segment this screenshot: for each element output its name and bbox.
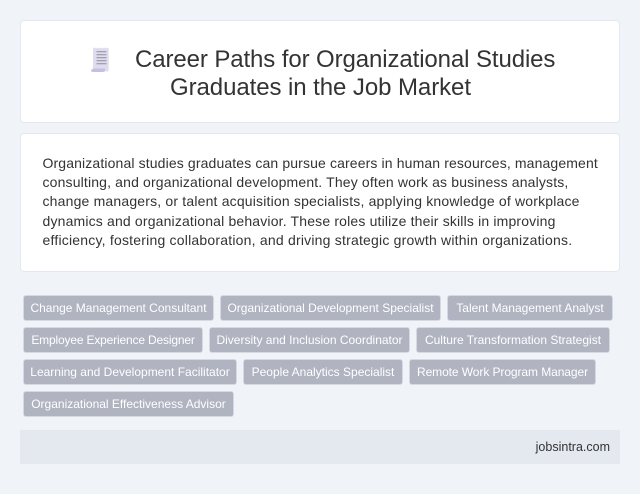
tag (243, 359, 403, 385)
tag (23, 391, 234, 417)
tag: Organizational Effectiveness Advisor (31, 397, 226, 411)
description text: consulting, and organizational development. They often work as business analysts, (42, 174, 568, 190)
tag list (23, 295, 613, 417)
heading line 1: Career Paths for Organizational Studies (135, 46, 555, 73)
panel: description (20, 133, 620, 272)
footer source text: jobsintra.com (536, 440, 610, 454)
tag: Culture Transformation Strategist (425, 333, 601, 347)
heading line 2: Graduates in the Job Market (170, 74, 471, 101)
tag (447, 295, 613, 321)
tag (209, 327, 410, 353)
footer bar (20, 430, 620, 464)
tag (409, 359, 596, 385)
tag (220, 295, 441, 321)
tag: Remote Work Program Manager (417, 365, 588, 379)
tag: Diversity and Inclusion Coordinator (216, 333, 403, 347)
tag: Organizational Development Specialist (227, 301, 434, 315)
tag (416, 327, 610, 353)
tag: Change Management Consultant (30, 301, 207, 315)
description text: Organizational studies graduates can pursue careers in human resources, management (42, 155, 598, 171)
tag: Talent Management Analyst (456, 301, 604, 315)
description text (42, 155, 598, 248)
tag (23, 295, 214, 321)
tag: Employee Experience Designer (31, 333, 195, 347)
description text: efficiency, fostering collaboration, and driving strategic growth within organizations. (42, 232, 572, 248)
tag: Learning and Development Facilitator (30, 365, 230, 379)
tag: People Analytics Specialist (252, 365, 394, 379)
icon: document (91, 48, 109, 72)
description text: dynamics and organizational behavior. These roles utilize their skills in improving (42, 213, 556, 229)
tag (23, 359, 237, 385)
description text: change managers, or talent acquisition specialists, applying knowledge of workplace (42, 193, 580, 209)
tag (23, 327, 203, 353)
panel: title card (20, 20, 620, 123)
